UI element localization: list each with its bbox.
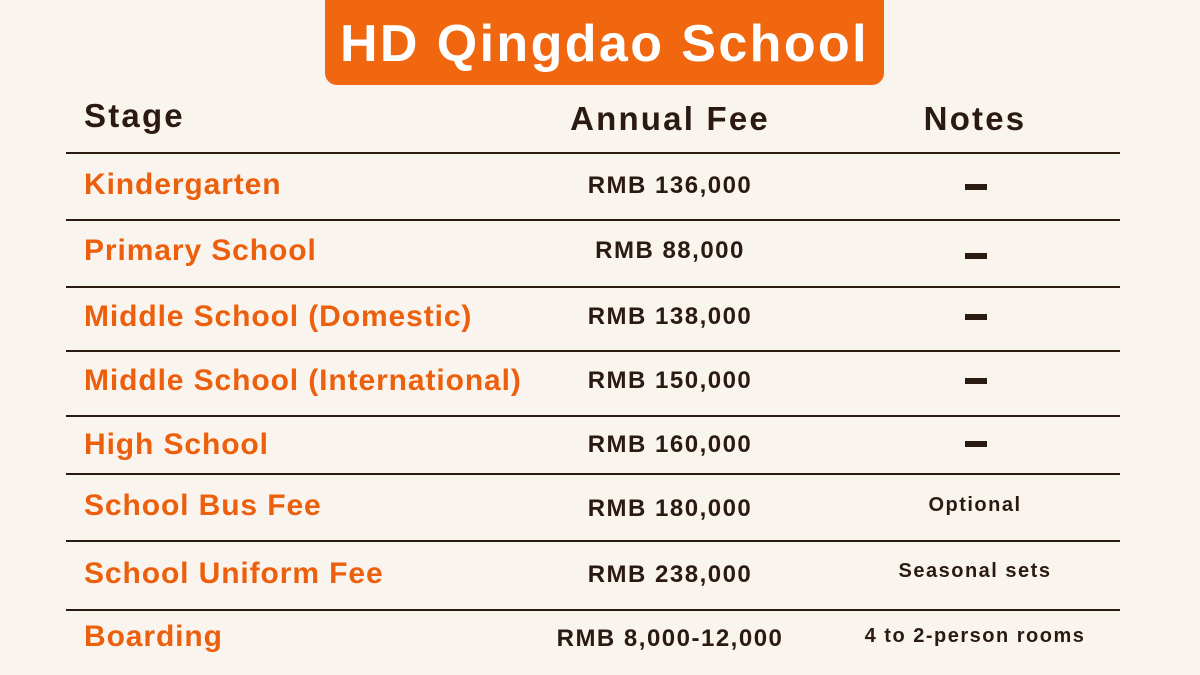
- row: middle domestic: RMB 138,000: [588, 303, 752, 330]
- row: kindergarten: Kindergarten: [84, 168, 282, 201]
- row: bus: RMB 180,000: [588, 495, 752, 522]
- row: boarding: RMB 8,000-12,000: [557, 625, 783, 652]
- row: high school: RMB 160,000: [588, 431, 752, 458]
- row: middle domestic: [84, 300, 987, 333]
- row: high school: [84, 428, 987, 461]
- row: primary: RMB 88,000: [595, 237, 745, 264]
- row: kindergarten: [84, 168, 987, 201]
- row: middle international: RMB 150,000: [588, 367, 752, 394]
- row: uniform: [84, 557, 1051, 590]
- row: middle domestic: Middle School (Domestic): [84, 300, 472, 333]
- title: [325, 0, 884, 85]
- row: bus: Optional: [928, 494, 1022, 516]
- header: notes: Notes: [924, 100, 1026, 137]
- row: bus: [84, 489, 1022, 522]
- row: boarding: [84, 620, 1085, 653]
- row: uniform: Seasonal sets: [899, 560, 1051, 582]
- row: high school: High School: [84, 428, 269, 461]
- row: uniform: School Uniform Fee: [84, 557, 384, 590]
- title: HD Qingdao School: [340, 15, 869, 73]
- row: boarding: Boarding: [84, 620, 223, 653]
- header: annual fee: Annual Fee: [570, 100, 770, 137]
- row: middle international: Middle School (International): [84, 364, 522, 397]
- row: kindergarten: RMB 136,000: [588, 172, 752, 199]
- header: stage: Stage: [84, 97, 185, 134]
- row: primary: Primary School: [84, 234, 317, 267]
- row: middle international: [84, 364, 987, 397]
- row: uniform: RMB 238,000: [588, 561, 752, 588]
- row: bus: School Bus Fee: [84, 489, 322, 522]
- row: boarding: 4 to 2-person rooms: [865, 625, 1085, 647]
- row: primary: [84, 234, 987, 267]
